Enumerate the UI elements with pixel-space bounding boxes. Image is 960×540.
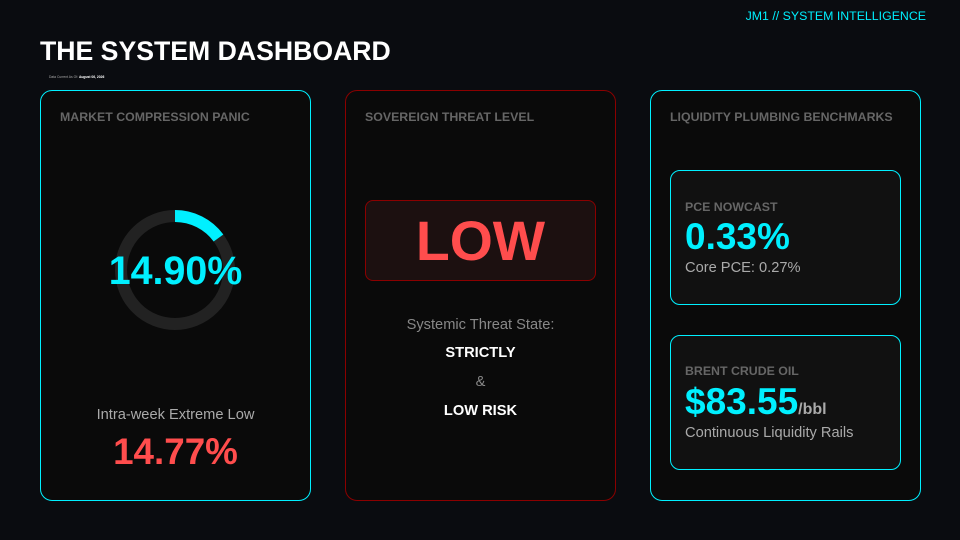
gauge value: 14.90% (109, 249, 242, 293)
ampersand: & (476, 374, 485, 390)
heading: market compression panic: MARKET COMPRESSION PANIC (60, 110, 250, 124)
threat badge (365, 200, 596, 281)
heading: liquidity plumbing benchmarks: LIQUIDITY PLUMBING BENCHMARKS (670, 110, 893, 124)
data date note: Data Current As Of: August 06, 2026 (49, 75, 104, 79)
pce value: 0.33% (685, 216, 790, 257)
intra-week value: 14.77% (113, 431, 238, 472)
brent label: BRENT CRUDE OIL (685, 364, 799, 378)
title: THE SYSTEM DASHBOARD (40, 36, 391, 66)
brent value: $83.55/bbl (685, 381, 827, 422)
threat state: low risk: LOW RISK (444, 402, 517, 418)
panel: market compression panic (40, 90, 311, 501)
threat state: strictly: STRICTLY (445, 345, 516, 361)
panel: liquidity plumbing benchmarks (650, 90, 921, 501)
threat value: LOW (416, 210, 545, 272)
liquidity rails note: Continuous Liquidity Rails (685, 425, 853, 441)
card: brent crude oil (670, 335, 901, 470)
heading: sovereign threat level: SOVEREIGN THREAT LEVEL (365, 110, 534, 124)
core pce: Core PCE: 0.27% (685, 260, 801, 276)
chart: gauge ring (115, 210, 235, 330)
intra-week label: Intra-week Extreme Low (97, 407, 254, 423)
threat state label: Systemic Threat State: (407, 316, 554, 332)
brand label: JM1 // SYSTEM INTELLIGENCE (746, 9, 926, 23)
panel: sovereign threat level (345, 90, 616, 501)
card: pce nowcast (670, 170, 901, 305)
pce label: PCE NOWCAST (685, 200, 778, 214)
